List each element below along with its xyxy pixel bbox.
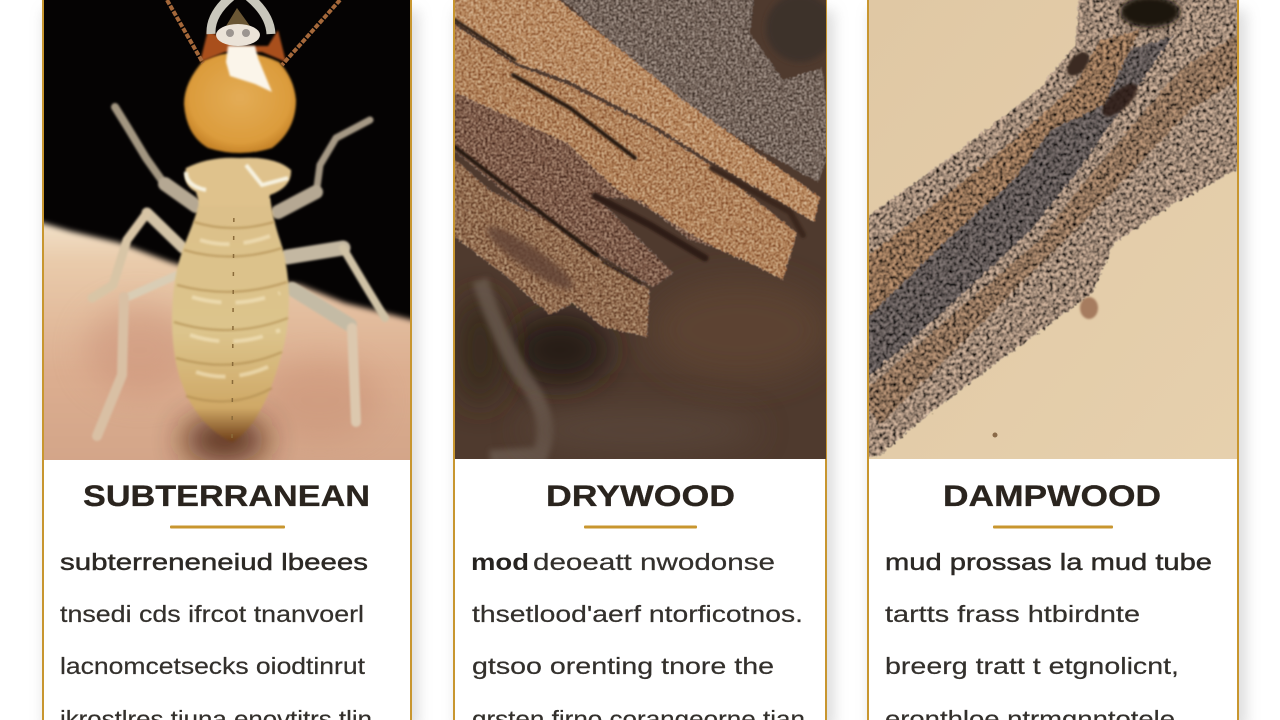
head: [184, 52, 296, 153]
panel: subterranean: [36, 0, 420, 720]
grey back layer: [552, 0, 832, 182]
photo: mud tube on sand: [860, 0, 1245, 460]
body copy: mud prossas la mud tube: [885, 549, 1212, 575]
body copy: deoeatt nwodonse: [533, 549, 775, 575]
abdomen: [172, 198, 289, 442]
text: subterranean: [60, 480, 372, 720]
body copy: thsetlood'aerf ntorficotnos.: [472, 601, 803, 627]
heading: dampwood: DAMPWOOD: [943, 480, 1161, 513]
accent rule: [584, 526, 697, 528]
body copy: mod: [471, 549, 529, 575]
body copy: tnsedi cds ifrcot tnanvoerl: [60, 601, 364, 627]
body copy: lacnomcetsecks oiodtinrut: [60, 653, 366, 679]
panel: drywood: [450, 0, 834, 720]
mandibles and face: [211, 0, 271, 34]
mud tube: [860, 0, 1245, 460]
heading: subterranean: SUBTERRANEAN: [83, 480, 370, 513]
accent rule: [993, 526, 1113, 528]
antennae: [167, 0, 340, 65]
thorax: [185, 158, 291, 206]
cracks: [455, 20, 803, 283]
panel: dampwood: [860, 0, 1246, 720]
text: dampwood: [885, 480, 1212, 720]
accent rule: [170, 526, 285, 528]
body copy: [60, 549, 372, 720]
body copy: [471, 549, 805, 720]
plank layers: [450, 0, 820, 337]
photo: subterranean termite: [36, 0, 420, 470]
body copy: tartts frass htbirdnte: [885, 601, 1140, 627]
body copy: subterreneneiud lbeees: [60, 549, 368, 575]
legs: [92, 107, 385, 436]
body copy: [885, 549, 1212, 720]
body copy: breerg tratt t etgnolicnt,: [885, 653, 1179, 679]
text: drywood: [471, 480, 805, 720]
photo: damaged wood: [450, 0, 834, 460]
heading: drywood: DRYWOOD: [546, 480, 735, 513]
body copy: gtsoo orenting tnore the: [472, 653, 774, 679]
